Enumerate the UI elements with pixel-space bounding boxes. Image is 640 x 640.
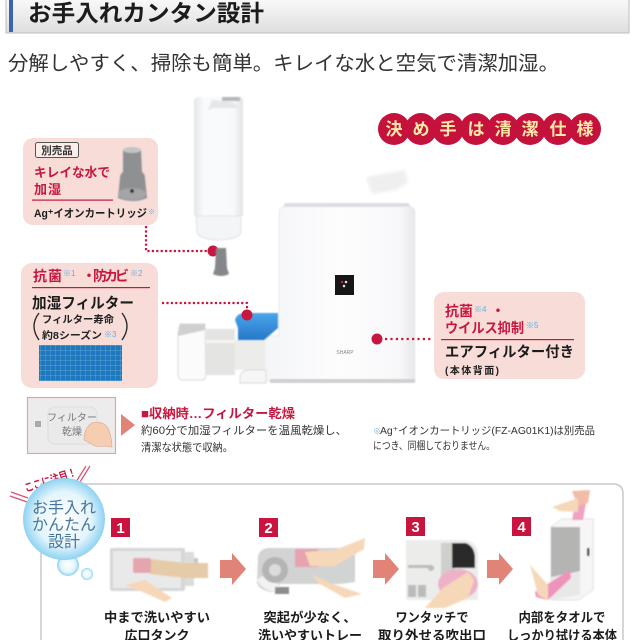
storage drying text: 約60分で加湿フィルターを温風乾燥し、 — [141, 423, 347, 437]
banner: 決め手は清潔仕様: 仕 — [550, 120, 566, 139]
blue filter in unit — [235, 310, 278, 340]
cartridge name: Ag⁺イオンカートリッジ — [34, 207, 147, 220]
panel: easy care steps — [41, 484, 623, 640]
bubble text: お手入れ — [32, 499, 96, 517]
icon: finger — [84, 422, 112, 447]
banner: 決め手は清潔仕様: 潔 — [522, 120, 538, 139]
bubble text: 設計 — [48, 533, 80, 551]
footnote — [373, 424, 595, 452]
banner: 決め手は清潔仕様: 手 — [440, 119, 456, 139]
dotted connector: cartridge — [146, 226, 218, 256]
step 2 caption: 突起が少なく、 — [264, 610, 356, 625]
antibacterial heading: 抗菌 — [33, 268, 62, 284]
step 2 image — [257, 538, 365, 598]
header bar — [6, 0, 629, 33]
panel: Ag+ cartridge — [23, 138, 158, 225]
filter life note: フィルター寿命 — [42, 313, 114, 326]
rear note: (本体背面) — [445, 364, 499, 377]
dotted connector: filter — [162, 303, 247, 310]
panel: humidifying filter — [21, 263, 158, 388]
banner: 決め手は清潔仕様: 清 — [494, 120, 512, 139]
bubble text: かんたん — [32, 516, 96, 534]
antibacterial heading: 抗菌 — [445, 303, 473, 319]
step 3 caption — [378, 610, 486, 640]
filter life note: ※3 — [104, 330, 117, 339]
step 4 image — [530, 490, 593, 600]
red heading: 加湿 — [34, 182, 61, 197]
blue filter image — [39, 345, 122, 381]
filter lid piece — [366, 170, 408, 194]
footnote: ※ — [373, 427, 381, 436]
connector dot — [242, 310, 252, 320]
panel: air filter: ※5 — [526, 321, 539, 330]
panel: air filter: ウイルス抑制 — [445, 320, 524, 336]
step 4 badge — [512, 517, 531, 536]
panel: humidifying filter: ※2 — [130, 269, 143, 278]
panel: air filter — [434, 292, 585, 379]
tray with filter — [178, 324, 266, 383]
icon: cartridge — [118, 147, 147, 201]
filter life note: 約8シーズン — [42, 329, 102, 342]
arrow 1 — [220, 553, 246, 585]
step 1 badge: 1 — [116, 520, 125, 537]
step 2 caption — [258, 610, 362, 640]
heading: お手入れカンタン設計 — [28, 0, 264, 26]
brand: SHARP — [336, 350, 354, 356]
logo badge — [335, 275, 354, 295]
filter title: 加湿フィルター — [32, 295, 134, 312]
step 3 image — [406, 540, 478, 608]
step 3 badge — [406, 517, 425, 536]
filter dry button image — [28, 398, 116, 454]
panel: humidifying filter: ・防カビ — [82, 268, 129, 284]
callout bubble — [23, 478, 105, 580]
water tank — [194, 97, 243, 240]
callout: attention label: ここに注目！ — [23, 465, 78, 495]
storage drying text — [141, 406, 347, 454]
step 3 caption: ワンタッチで — [396, 610, 468, 625]
tag: sold separately: 別売品 — [41, 144, 73, 157]
banner: 決め手は清潔仕様: 様 — [576, 120, 594, 139]
subtitle text: 分解しやすく、掃除も簡単。キレイな水と空気で清潔加湿。 — [8, 52, 559, 75]
dotted connector: air filter — [372, 334, 433, 344]
main humidifier unit — [264, 203, 415, 383]
step 1 caption — [104, 610, 210, 640]
step 1 caption: 中まで洗いやすい — [104, 610, 210, 625]
callout: attention label — [10, 465, 90, 502]
step 1 image — [110, 548, 208, 602]
red heading — [34, 165, 110, 197]
panel: humidifying filter: ※1 — [63, 269, 76, 278]
small cartridge — [213, 248, 229, 276]
banner: 決め手は清潔仕様: は — [468, 120, 484, 139]
step 4 caption — [507, 610, 617, 640]
filter life note — [34, 313, 127, 342]
footnote: につき、同梱しておりません。 — [373, 439, 495, 452]
banner: 決め手は清潔仕様 — [378, 113, 601, 145]
banner: 決め手は清潔仕様: 決 — [386, 120, 402, 139]
step 2 badge: 2 — [264, 520, 273, 537]
panel: air filter: ・ — [491, 303, 505, 319]
step 2 badge — [259, 518, 278, 537]
filter dry button image: フィルター — [47, 412, 97, 424]
storage drying text: 清潔な状態で収納。 — [141, 440, 233, 454]
step 3 badge: 3 — [411, 519, 420, 536]
bubble text — [32, 499, 96, 551]
air filter title: エアフィルター付き — [445, 344, 574, 361]
panel: air filter: ※4 — [474, 305, 487, 314]
red heading: キレイな水で — [34, 165, 110, 180]
footnote: Ag⁺イオンカートリッジ(FZ-AG01K1)は別売品 — [380, 424, 595, 437]
banner: 決め手は清潔仕様: め — [412, 120, 430, 139]
step 4 badge: 4 — [517, 519, 526, 536]
panel: Ag+ cartridge: ※ — [148, 208, 155, 216]
step 1 badge — [111, 518, 130, 537]
filter dry button image: 乾燥 — [62, 425, 82, 438]
arrow 3 — [487, 553, 513, 585]
arrow — [121, 414, 135, 436]
storage drying text: ■収納時…フィルター乾燥 — [141, 406, 295, 421]
step 4 caption: 内部をタオルで — [518, 610, 606, 625]
arrow 2 — [373, 553, 399, 585]
